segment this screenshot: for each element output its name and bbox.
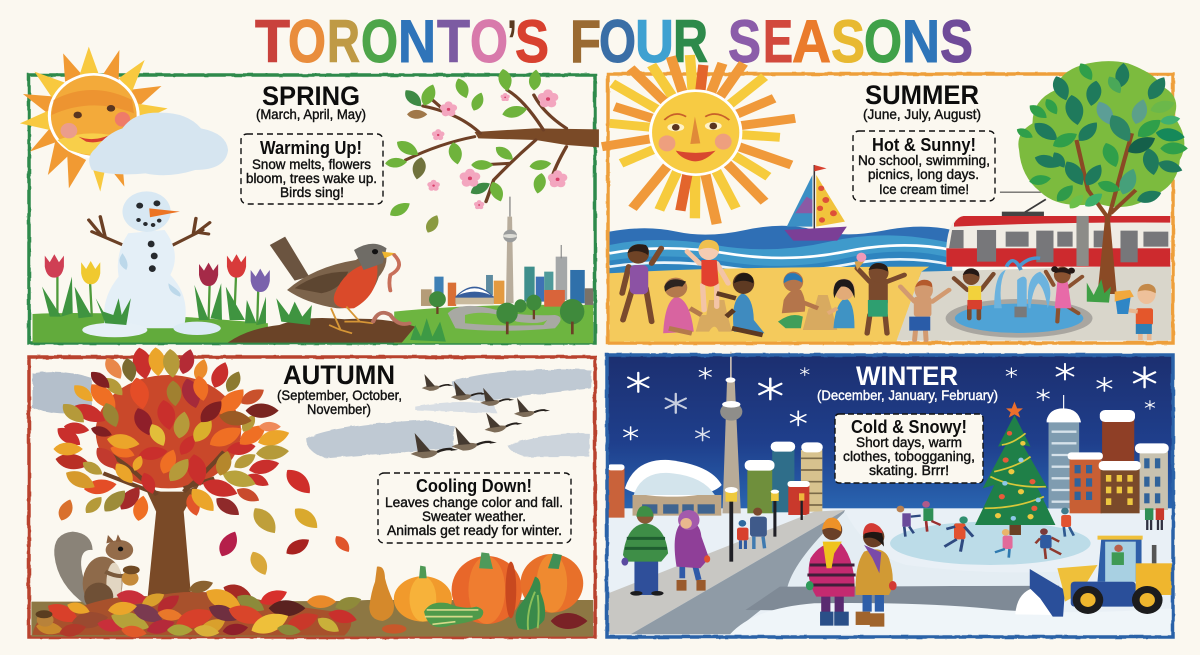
months: autumn: November) — [307, 401, 371, 417]
streetcar — [946, 192, 1170, 267]
fountain — [946, 258, 1093, 338]
lake — [610, 226, 952, 277]
pumpkins and gourds — [369, 552, 587, 634]
pumpkin: left — [394, 566, 452, 622]
autumn illustration — [31, 346, 593, 639]
snowbanks — [730, 512, 1173, 635]
spring illustration — [20, 47, 599, 343]
panel: winter — [607, 352, 1173, 637]
gourd: yellow — [369, 566, 394, 621]
icon: smiling sun — [20, 47, 168, 192]
months: autumn: (September, October, — [277, 387, 402, 403]
couple on right — [1145, 508, 1164, 530]
title: N — [902, 8, 940, 75]
icon: snowman — [82, 191, 221, 337]
months: spring: (March, April, May) — [256, 106, 366, 122]
callout: cooling down: Sweater weather. — [422, 509, 526, 524]
panel: summer — [602, 55, 1188, 343]
CN Tower — [720, 352, 742, 513]
callout: hot and sunny: Hot & Sunny! — [872, 135, 976, 155]
snowflakes — [624, 364, 1155, 441]
couple: striped and mustard coats — [806, 518, 897, 627]
small gourd — [382, 624, 406, 634]
callout: warming up — [241, 134, 383, 204]
downtown buildings right — [1047, 395, 1169, 513]
couple: green and purple coats — [621, 506, 710, 596]
title: S — [515, 8, 549, 75]
street lamps — [725, 487, 804, 562]
title: O — [599, 8, 636, 75]
title: T — [255, 8, 290, 75]
title: R — [673, 8, 708, 75]
callout: hot and sunny: Ice cream time! — [879, 182, 969, 197]
autumn border — [29, 357, 595, 637]
callout: cooling down: Leaves change color and fall. — [385, 495, 563, 510]
callout: warming up: Warming Up! — [260, 138, 362, 158]
callout: cold and snowy: skating. Brrr! — [869, 463, 949, 478]
months: winter: (December, January, February) — [817, 387, 998, 403]
sidewalk — [608, 510, 845, 634]
winter illustration — [608, 352, 1173, 637]
icon: big sun — [602, 55, 795, 224]
snow plow — [1015, 536, 1172, 617]
icon: cloud — [89, 113, 228, 175]
heading: autumn: AUTUMN — [283, 360, 395, 390]
callout: cooling down — [378, 473, 571, 543]
child: boy with bucket — [1115, 284, 1156, 340]
sandcastles — [696, 295, 837, 332]
gourd: striped — [424, 603, 483, 627]
child: boy in blue stripes — [717, 273, 765, 335]
crown leaves — [53, 346, 292, 522]
grey clouds — [33, 369, 591, 458]
callout: warming up: bloom, trees wake up. — [246, 171, 377, 186]
tree — [1015, 61, 1188, 294]
title: S — [831, 8, 865, 75]
title: U — [635, 8, 674, 75]
child: blonde girl in red — [687, 240, 728, 310]
grass tuft at tree — [1087, 279, 1111, 303]
autumn tree — [53, 346, 292, 600]
title: T — [437, 8, 470, 75]
road — [631, 510, 1059, 634]
fallen leaf — [551, 613, 587, 629]
snowfield — [608, 508, 1173, 637]
heading: winter: WINTER — [856, 361, 958, 391]
callout: warming up: Birds sing! — [280, 185, 344, 200]
panel: autumn — [29, 346, 595, 639]
panel: spring — [20, 47, 599, 343]
falling leaves — [215, 465, 353, 578]
plaza — [897, 265, 1171, 341]
title: S — [728, 8, 761, 75]
months: summer: (June, July, August) — [863, 106, 981, 122]
title: O — [864, 8, 902, 75]
summer border — [608, 74, 1173, 343]
months: autumn — [277, 387, 402, 417]
winter border — [607, 355, 1173, 637]
skating rink — [890, 522, 1091, 565]
title: F — [570, 8, 601, 75]
callout: warming up: Snow melts, flowers — [252, 157, 371, 172]
spring ground — [33, 305, 593, 343]
title: A — [792, 8, 831, 75]
night sky — [608, 355, 1173, 515]
callout: cooling down: Cooling Down! — [416, 476, 532, 496]
tulips — [42, 254, 312, 325]
title: O — [470, 8, 508, 75]
child: girl in blue — [828, 279, 855, 328]
children on the beach — [622, 240, 949, 340]
callout: hot and sunny: picnics, long days. — [868, 167, 979, 182]
pumpkin: right — [520, 553, 583, 613]
callout: hot and sunny — [853, 131, 995, 201]
summer illustration — [602, 55, 1188, 342]
Christmas tree — [975, 402, 1055, 535]
leaf pile — [33, 578, 364, 639]
callout: cold and snowy: Cold & Snowy! — [851, 417, 967, 437]
child: girl in pink — [663, 278, 701, 333]
grass tuft — [410, 318, 446, 342]
callout: cold and snowy — [835, 414, 983, 483]
geese — [411, 374, 550, 458]
callout: hot and sunny: No school, swimming, — [858, 153, 990, 168]
child: boy in blue shorts — [900, 280, 949, 340]
downtown buildings left — [608, 442, 823, 518]
children at the fountain — [954, 266, 1156, 340]
Toronto skyline — [421, 197, 593, 334]
child: girl in purple — [622, 244, 661, 322]
heading: summer: SUMMER — [865, 80, 979, 110]
child: boy with ice cream — [854, 253, 904, 333]
callout: cooling down: Animals get ready for winter. — [387, 523, 562, 538]
gourd: green pear — [515, 577, 545, 630]
title: E — [763, 8, 793, 75]
callout: cold and snowy: Short days, warm — [856, 435, 962, 450]
title: ’ — [507, 8, 517, 75]
icon: robin with worm — [270, 237, 409, 333]
title: N — [398, 8, 436, 75]
child: pink dress — [1046, 266, 1082, 322]
icon: acorn — [36, 610, 54, 627]
spring border — [29, 75, 595, 343]
stadium — [625, 460, 722, 516]
skaters — [897, 501, 1074, 559]
title — [255, 8, 973, 75]
title: O — [288, 8, 326, 75]
pumpkin: large — [452, 552, 522, 624]
heading: spring: SPRING — [262, 81, 360, 111]
title: R — [327, 8, 360, 75]
icon: squirrel — [54, 532, 140, 611]
callout: cold and snowy: clothes, tobogganing, — [843, 449, 975, 464]
family walking — [737, 508, 767, 549]
child: yellow shirt — [954, 268, 993, 318]
ground — [31, 600, 593, 637]
child: boy in green trunks — [778, 272, 818, 328]
icon: sailboat — [784, 165, 847, 241]
sand — [610, 267, 929, 342]
cherry blossom branch — [385, 68, 599, 235]
title: O — [361, 8, 398, 75]
title: S — [940, 8, 973, 75]
